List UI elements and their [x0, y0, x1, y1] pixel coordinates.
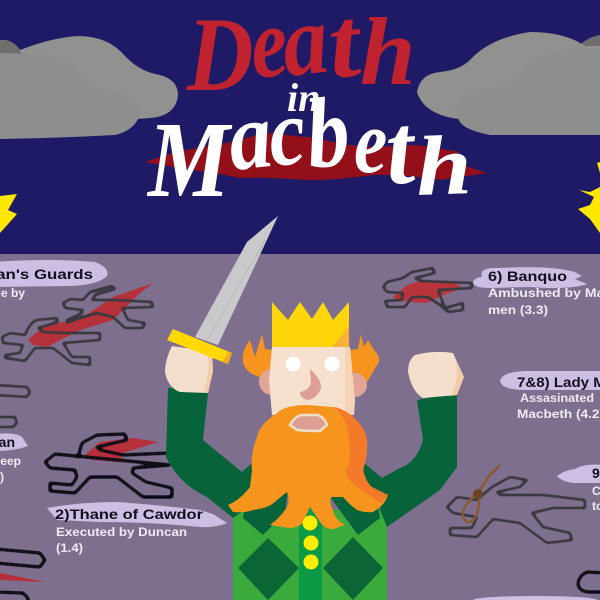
label: Lady Macduff and son: Assasinated	[520, 391, 594, 405]
right eye	[324, 356, 340, 372]
left hair	[243, 334, 273, 385]
beard	[228, 405, 388, 529]
left hand	[165, 346, 213, 393]
label: bottom pill	[473, 596, 597, 600]
title: Macbeth: b	[301, 76, 355, 191]
label: Thane of Cawdor: Executed by Duncan	[56, 525, 187, 539]
head	[269, 347, 355, 415]
sword guard	[167, 329, 232, 364]
title: Macbeth: h	[414, 118, 473, 214]
label: Lady Macduff and son: Macbeth (4.2)	[517, 407, 600, 421]
torso	[233, 505, 387, 600]
outline: Duncan	[0, 385, 30, 427]
title: Macbeth: M	[146, 100, 232, 220]
shoulder	[363, 462, 400, 500]
character: Macbeth	[165, 216, 464, 600]
label: Duncan	[0, 433, 28, 484]
collar	[243, 480, 380, 535]
outline: lower left victim	[0, 549, 45, 600]
title: Macbeth: a	[223, 83, 276, 191]
title: in: in	[287, 75, 320, 120]
label: Banquo: men (3.3)	[488, 303, 548, 317]
crown	[272, 302, 349, 347]
label: Thane of Cawdor	[47, 502, 227, 555]
ground	[0, 254, 600, 600]
title: Death	[186, 0, 416, 113]
title: Macbeth	[146, 76, 473, 220]
left ear	[259, 369, 285, 395]
title: Death: h	[360, 0, 416, 106]
title: Macbeth: c	[263, 79, 310, 187]
nose	[300, 369, 321, 400]
right hair	[350, 334, 379, 382]
blood streak behind title	[145, 133, 487, 180]
title: Death: D	[186, 0, 253, 113]
label: Banquo	[473, 267, 600, 317]
left eye	[286, 356, 300, 372]
outline: Thane of Cawdor	[45, 434, 172, 497]
right sleeve	[380, 395, 457, 527]
title: Macbeth: t	[382, 93, 420, 206]
left lightning bolt	[0, 194, 17, 233]
sword blade	[195, 216, 278, 345]
right ear	[343, 373, 367, 397]
outline: Duncan's guard 1	[2, 283, 153, 365]
outline: Banquo	[383, 268, 472, 312]
outline: hanged body with noose	[447, 465, 585, 543]
left sleeve	[166, 388, 258, 518]
title: Macbeth: e	[354, 92, 387, 192]
right lightning bolt	[578, 162, 600, 233]
buttons	[302, 516, 318, 570]
label: Lady Macbeth	[557, 464, 600, 513]
left storm cloud	[0, 36, 178, 139]
label: Lady Macduff and son	[500, 371, 600, 421]
outline: lower right victim	[578, 572, 600, 592]
right hand	[408, 352, 464, 398]
label: Banquo: 6) Banquo	[488, 268, 567, 284]
mouth	[290, 415, 327, 431]
label: Duncan's guards	[0, 260, 108, 300]
label: Thane of Cawdor: 2)Thane of Cawdor	[55, 506, 204, 522]
label: Thane of Cawdor: (1.4)	[56, 541, 83, 555]
right storm cloud	[417, 32, 600, 135]
night sky	[0, 0, 600, 255]
